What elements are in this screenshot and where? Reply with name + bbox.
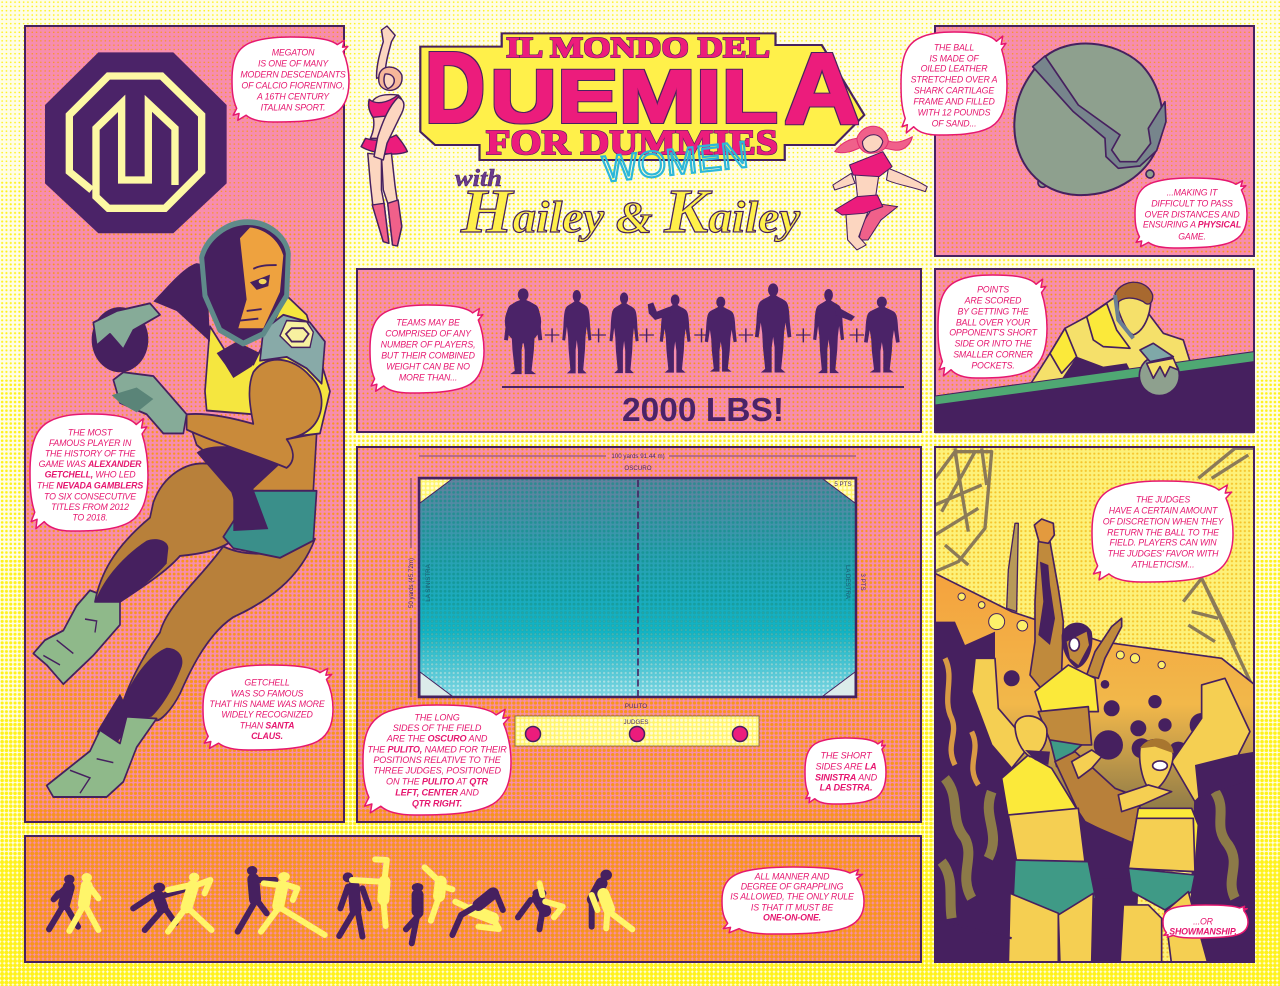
pair 8 bbox=[592, 870, 632, 929]
title letters UEMIL: UEMIL bbox=[490, 55, 778, 138]
pair 4 bbox=[339, 859, 387, 937]
right truss tower bbox=[1183, 448, 1255, 692]
pair 6 bbox=[452, 893, 503, 935]
big arm bbox=[187, 360, 322, 468]
lifted player arm bbox=[1030, 542, 1063, 693]
speech bubble: long sides: LEFT, CENTER AND bbox=[395, 788, 479, 798]
silhouette 3 bbox=[610, 292, 639, 373]
panel: celebrating players bbox=[935, 447, 1255, 965]
corner pocket top left bbox=[420, 479, 452, 503]
corner pocket top right bbox=[823, 479, 855, 503]
pole bbox=[1007, 523, 1018, 612]
lower glove bbox=[113, 372, 187, 433]
illustration: Kailey cheerleader bbox=[833, 126, 927, 250]
ball bbox=[92, 307, 148, 372]
speech bubble: grappling rule bbox=[722, 867, 864, 934]
speech bubble: judges: HAVE A CERTAIN AMOUNT bbox=[1109, 506, 1218, 516]
silhouette 1 bbox=[504, 288, 542, 374]
plus 7 bbox=[849, 328, 864, 342]
speech bubble: points: ARE SCORED bbox=[964, 296, 1022, 306]
speech bubble: making it difficult bbox=[1135, 178, 1247, 248]
title block bbox=[420, 32, 864, 246]
hand bbox=[1147, 358, 1178, 378]
speech bubble: teams: WEIGHT CAN BE NO bbox=[386, 362, 470, 372]
speech bubble: points: POINTS bbox=[977, 284, 1009, 294]
speech bubble: short sides: SIDES ARE LA bbox=[815, 762, 877, 772]
speech bubble: Megaton: OF CALCIO FIORENTINO, bbox=[241, 80, 345, 90]
lifted player head bbox=[1062, 623, 1092, 668]
player silhouettes with plus signs bbox=[504, 283, 900, 374]
speech bubble: judges bbox=[1092, 481, 1233, 582]
shoulder pad bbox=[260, 315, 325, 384]
plus 1 bbox=[545, 328, 559, 342]
ball bbox=[1139, 356, 1179, 396]
silhouette 4 bbox=[648, 294, 691, 373]
speech bubble: most famous player: THE NEVADA GAMBLERS bbox=[37, 480, 143, 490]
speech bubble: most famous player bbox=[30, 414, 148, 531]
silhouette 6 bbox=[755, 283, 791, 372]
speech bubble: the ball: WITH 12 POUNDS bbox=[918, 108, 991, 118]
speech bubble: teams: BUT THEIR COMBINED bbox=[381, 350, 476, 360]
illustration: running player with ball bbox=[33, 222, 330, 797]
lifted player far arm bbox=[1087, 618, 1122, 678]
corner pocket bottom left bbox=[420, 672, 452, 696]
illustration: stadium and players bbox=[935, 447, 1255, 965]
speech bubble: making it difficult: GAME. bbox=[1178, 232, 1206, 242]
with: with bbox=[455, 166, 502, 192]
panel: field diagram bbox=[357, 447, 921, 822]
lifted player fist bbox=[1034, 519, 1054, 543]
left player shorts bbox=[1013, 860, 1096, 915]
speech bubble: grappling rule: DEGREE OF GRAPPLING bbox=[741, 882, 844, 892]
illustration: sand-filled ball bbox=[1014, 44, 1166, 195]
speech bubble: showmanship bbox=[1163, 905, 1248, 938]
icon: Megaton octagon logo bbox=[45, 52, 227, 233]
lifted player shorts bbox=[1050, 740, 1082, 767]
speech bubble: points: POCKETS. bbox=[971, 360, 1015, 370]
judges box bbox=[515, 716, 759, 746]
right player legs bbox=[1120, 905, 1162, 965]
judge left bbox=[526, 726, 540, 742]
sum line bbox=[502, 386, 904, 388]
plus 6 bbox=[796, 328, 811, 342]
speech bubble: Getchell's fame: THAN SANTA bbox=[240, 720, 294, 730]
speech bubble: making it difficult: DIFFICULT TO PASS bbox=[1151, 198, 1233, 208]
illustration: Hailey cheerleader bbox=[361, 26, 407, 246]
speech bubble: most famous player: FAMOUS PLAYER IN bbox=[49, 438, 132, 448]
speech bubble: points: SIDE OR INTO THE bbox=[954, 338, 1032, 348]
shorts bbox=[223, 491, 317, 558]
left player head bbox=[1015, 716, 1047, 757]
speech bubble: Getchell's fame: THAT HIS NAME WAS MORE bbox=[209, 699, 325, 709]
left player arm bbox=[972, 658, 1025, 768]
tank top bbox=[205, 296, 330, 437]
speech bubble: the ball: OF SAND... bbox=[932, 118, 976, 128]
speech bubble: long sides: ARE THE OSCURO AND bbox=[387, 734, 487, 744]
speech bubble: Getchell's fame bbox=[203, 665, 333, 750]
speech bubble: long sides: SIDES OF THE FIELD bbox=[393, 723, 482, 733]
illustration: player scoring with ball bbox=[935, 282, 1254, 433]
speech bubble: grappling rule: IS THAT IT MUST BE bbox=[751, 902, 833, 912]
title line: Il Mondo del: IL MONDO DEL bbox=[506, 32, 770, 64]
right player shorts bbox=[1128, 868, 1195, 910]
speech bubble: Megaton: MODERN DESCENDANTS bbox=[240, 70, 346, 80]
rear thigh bbox=[95, 463, 237, 602]
left player torso bbox=[1002, 755, 1082, 862]
speech bubble: most famous player: TO 2018. bbox=[72, 512, 108, 522]
field length dimension: 100 yards 91.44 m) bbox=[611, 453, 665, 460]
pair 1 bbox=[49, 873, 98, 931]
speech bubble: short sides: SINISTRA AND bbox=[815, 772, 877, 782]
label: la sinistra: LA SINISTRA bbox=[425, 563, 432, 602]
speech bubble: judges: RETURN THE BALL TO THE bbox=[1107, 528, 1219, 538]
speech bubble: teams bbox=[370, 305, 484, 393]
silhouette 2 bbox=[562, 290, 591, 373]
speech bubble: Megaton: ITALIAN SPORT. bbox=[261, 102, 325, 112]
title letter A: A bbox=[784, 33, 860, 145]
speech bubble: grappling rule: IS ALLOWED, THE ONLY RULE bbox=[730, 892, 854, 902]
speech bubble: showmanship: ...OR bbox=[1193, 916, 1214, 926]
player body bbox=[1030, 298, 1192, 385]
plus 2 bbox=[591, 328, 606, 342]
crowd right bbox=[1190, 779, 1253, 961]
crowd left bbox=[935, 622, 1022, 965]
panel: team weight limit bbox=[357, 269, 921, 432]
judge centre bbox=[630, 726, 644, 742]
speech bubble: judges: OF DISCRETION WHEN THEY bbox=[1103, 516, 1225, 526]
grappling pair silhouettes bbox=[49, 859, 632, 943]
speech bubble: most famous player: THE HISTORY OF THE bbox=[45, 448, 135, 458]
speech bubble: long sides: THE LONG bbox=[414, 712, 460, 722]
speech bubble: short sides: THE SHORT bbox=[820, 750, 873, 760]
right player arm bbox=[1172, 678, 1250, 802]
front leg bbox=[120, 539, 315, 720]
speech bubble: points: SMALLER CORNER bbox=[953, 350, 1034, 360]
speech bubble: grappling rule: ALL MANNER AND bbox=[754, 872, 830, 882]
silhouette 5 bbox=[705, 297, 737, 372]
speech bubble: judges: THE JUDGES bbox=[1136, 494, 1190, 504]
speech bubble: most famous player: THE MOST bbox=[68, 428, 113, 438]
speech bubble: teams: COMPRISED OF ANY bbox=[385, 328, 472, 338]
speech bubble: showmanship: SHOWMANSHIP. bbox=[1169, 926, 1237, 936]
speech bubble: the ball: IS MADE OF bbox=[929, 54, 979, 64]
speech bubble: teams: NUMBER OF PLAYERS, bbox=[381, 340, 475, 350]
crowd squiggles bbox=[945, 658, 978, 785]
speech bubble: the ball: STRETCHED OVER A bbox=[911, 74, 998, 84]
title banner bbox=[420, 33, 864, 160]
speech bubble: Getchell's fame: WIDELY RECOGNIZED bbox=[221, 710, 313, 720]
speech bubble: Getchell's fame: GETCHELL bbox=[244, 678, 290, 688]
stadium bowl bbox=[935, 573, 1255, 812]
total weight: 2000 LBS! bbox=[622, 391, 784, 428]
right player shielding arm bbox=[1118, 785, 1172, 812]
pair 3 bbox=[238, 866, 325, 935]
rear boot bbox=[33, 590, 120, 684]
lifted player leg bbox=[1055, 752, 1142, 845]
plus 4 bbox=[694, 328, 709, 342]
handwritten WOMEN: WOMEN bbox=[601, 134, 750, 190]
speech bubble: most famous player: TO SIX CONSECUTIVE bbox=[44, 492, 136, 502]
speech bubble: the ball bbox=[901, 32, 1007, 135]
speech bubble: the ball: SHARK CARTILAGE bbox=[914, 86, 994, 96]
speech bubble: judges: THE JUDGES' FAVOR WITH bbox=[1108, 548, 1219, 558]
speech bubble: long sides: THREE JUDGES, POSITIONED bbox=[373, 766, 501, 776]
speech bubble: short sides bbox=[805, 738, 886, 804]
speech bubble: Megaton: IS ONE OF MANY bbox=[258, 58, 329, 68]
upper glove bbox=[93, 303, 160, 349]
title letter D: D bbox=[425, 32, 485, 144]
front boot bbox=[47, 717, 157, 797]
hand on lifted player bbox=[1072, 750, 1102, 778]
speech bubble: Getchell's fame: CLAUS. bbox=[251, 731, 283, 741]
crowd centre bottom bbox=[1080, 816, 1138, 961]
speech bubble: points: BALL OVER YOUR bbox=[956, 318, 1031, 328]
plus 3 bbox=[639, 328, 654, 342]
panel: Megaton and Getchell, left column bbox=[25, 26, 349, 822]
centre line bbox=[637, 480, 639, 696]
label: 3 pts: 3 PTS bbox=[859, 573, 866, 591]
speech bubble: Megaton: A 16TH CENTURY bbox=[256, 92, 330, 102]
speech bubble: long sides: QTR RIGHT. bbox=[412, 798, 462, 808]
pair 7 bbox=[518, 883, 563, 929]
pair 2 bbox=[133, 873, 212, 932]
judges box: JUDGES bbox=[623, 719, 649, 726]
stadium floor line bbox=[935, 920, 1255, 948]
right player head bbox=[1140, 740, 1173, 792]
plus 5 bbox=[739, 328, 753, 342]
speech bubble: most famous player: GETCHELL, WHO LED bbox=[45, 470, 135, 480]
panel: scoring bbox=[935, 269, 1254, 433]
speech bubble: most famous player: GAME WAS ALEXANDER bbox=[39, 459, 141, 469]
Hailey and Kailey script: Hailey & Kailey bbox=[460, 178, 800, 246]
left player legs bbox=[1008, 893, 1058, 965]
side label: pulito: PULITO bbox=[625, 703, 647, 710]
speech bubble: teams: MORE THAN... bbox=[399, 372, 457, 382]
right player torso bbox=[1128, 808, 1198, 872]
silhouette 7 bbox=[813, 289, 855, 373]
track and ground bbox=[935, 352, 1254, 405]
label: la destra: LA DESTRA bbox=[844, 565, 851, 600]
helmet bbox=[202, 222, 288, 344]
judge right bbox=[732, 726, 748, 742]
speech bubble: teams: TEAMS MAY BE bbox=[396, 318, 460, 328]
crowd heads bbox=[1004, 670, 1214, 762]
side label: oscuro: OSCURO bbox=[624, 465, 652, 472]
speech bubble: long sides: POSITIONS RELATIVE TO THE bbox=[373, 755, 502, 765]
speech bubble: making it difficult: OVER DISTANCES AND bbox=[1144, 210, 1240, 220]
shadow arm bbox=[153, 263, 210, 342]
speech bubble: points: BY GETTING THE bbox=[957, 306, 1029, 316]
speech bubble: long sides: THE PULITO, NAMED FOR THEIR bbox=[367, 744, 507, 754]
speech bubble: points bbox=[938, 275, 1047, 378]
head bbox=[1118, 287, 1151, 335]
speech bubble: Megaton bbox=[232, 37, 349, 122]
speech bubble: making it difficult: ENSURING A PHYSICAL bbox=[1143, 220, 1241, 230]
camera flashes bbox=[958, 593, 1165, 669]
speech bubble: grappling rule: ONE-ON-ONE. bbox=[763, 912, 821, 922]
speech bubble: most famous player: TITLES FROM 2012 bbox=[51, 502, 129, 512]
belly bbox=[192, 432, 318, 490]
silhouette 8 bbox=[864, 297, 900, 372]
panel: ball bbox=[901, 26, 1254, 256]
title line: for dummies: FOR DUMMIES bbox=[486, 123, 778, 162]
left truss tower bbox=[935, 448, 992, 572]
speech bubble: the ball: THE BALL bbox=[934, 42, 974, 52]
speech bubble: short sides: LA DESTRA. bbox=[820, 782, 872, 792]
speech bubble: long sides: ON THE PULITO AT QTR bbox=[386, 776, 488, 786]
playing field bbox=[419, 478, 856, 697]
speech bubble: judges: FIELD. PLAYERS CAN WIN bbox=[1109, 538, 1217, 548]
speech bubble: long sides bbox=[363, 705, 511, 815]
speech bubble: points: OPPONENT'S SHORT bbox=[949, 328, 1038, 338]
pair 5 bbox=[406, 867, 452, 943]
speech bubble: judges: ATHLETICISM... bbox=[1131, 560, 1194, 570]
face bbox=[238, 228, 283, 328]
lifted player torso bbox=[1035, 665, 1098, 712]
speech bubble: Megaton: MEGATON bbox=[272, 48, 315, 58]
speech bubble: Getchell's fame: WAS SO FAMOUS bbox=[231, 688, 304, 698]
speech bubble: making it difficult: ...MAKING IT bbox=[1167, 188, 1218, 198]
corner pocket bottom right bbox=[823, 672, 855, 696]
label: 5 pts: 5 PTS bbox=[834, 481, 852, 488]
speech bubble: the ball: FRAME AND FILLED bbox=[913, 96, 995, 106]
speech bubble: the ball: OILED LEATHER bbox=[921, 64, 988, 74]
panel: grappling bbox=[25, 836, 921, 962]
field width dimension: 50 yards (45.72m) bbox=[408, 558, 415, 608]
